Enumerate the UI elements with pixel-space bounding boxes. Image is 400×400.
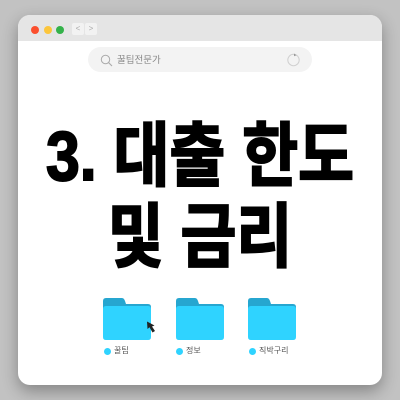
yellow window button bbox=[44, 26, 52, 34]
icon: folder 2 bbox=[176, 298, 224, 340]
icon: cursor bbox=[147, 322, 155, 332]
folder 3 dot bbox=[248, 348, 256, 354]
green window button bbox=[56, 26, 64, 34]
red window button bbox=[31, 26, 39, 34]
forward button bbox=[85, 23, 97, 35]
search bar bbox=[88, 47, 312, 72]
folder 2 dot bbox=[176, 348, 182, 354]
search text: 꿀팁전문가 bbox=[117, 55, 161, 66]
back button bbox=[72, 23, 84, 35]
folder 1 text: 꿀팁 bbox=[114, 346, 129, 355]
icon: reload bbox=[287, 54, 300, 66]
folder 1 dot bbox=[104, 348, 111, 354]
folder 3 text: 직박구리 bbox=[259, 346, 288, 355]
forward button: > bbox=[89, 24, 93, 33]
icon: folder 3 bbox=[248, 298, 296, 340]
back button: < bbox=[76, 24, 80, 33]
icon: magnifier bbox=[100, 54, 112, 66]
title line 2: 및 금리 bbox=[108, 198, 292, 276]
title line 1: 3. 대출 한도 bbox=[46, 117, 354, 195]
title bar bbox=[18, 15, 382, 41]
folder 2 text: 정보 bbox=[186, 346, 201, 355]
icon: folder 1 bbox=[103, 298, 151, 340]
